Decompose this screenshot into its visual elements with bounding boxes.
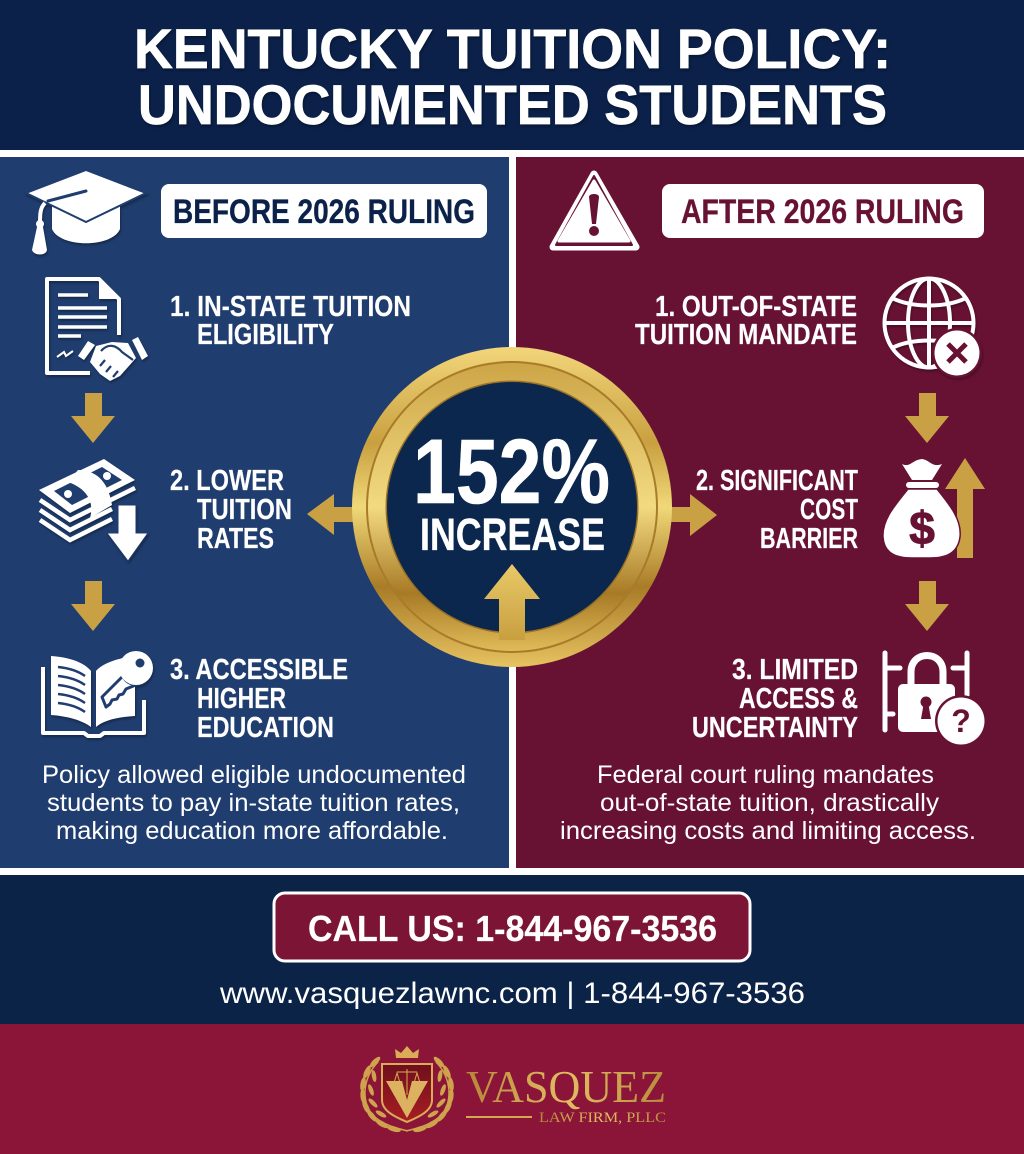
step 3 label [692, 654, 858, 744]
stat label: increase: INCREASE [420, 509, 605, 560]
arrow: medallion to left panel [307, 494, 354, 535]
description: after [560, 761, 976, 845]
step 2 label [170, 465, 292, 555]
icon: padlock with question mark [885, 653, 987, 747]
call-us button: CALL US: 1-844-967-3536 [308, 908, 717, 949]
icon: padlock with question mark: ? [951, 703, 971, 739]
step 2 label: COST [800, 494, 858, 526]
call-us button [274, 893, 750, 961]
step 3 label: UNCERTAINTY [692, 712, 858, 744]
arrow: step 2 to 3 [71, 581, 115, 631]
title banner [0, 0, 1024, 150]
step 3 label: ACCESS & [739, 683, 858, 715]
icon: document and handshake [47, 279, 148, 381]
icon: graduation cap [26, 170, 146, 254]
stat: 152%: 152% [413, 421, 610, 523]
heading pill: after 2026 ruling: AFTER 2026 RULING [681, 193, 964, 231]
step 3 label: HIGHER [197, 683, 286, 715]
panel: before 2026 ruling [0, 157, 509, 868]
step 2 label: RATES [197, 523, 274, 555]
wreath right [406, 1055, 455, 1133]
footer: logo band [0, 1024, 1024, 1154]
description: before: Policy allowed eligible undocumented [42, 761, 466, 789]
description: before [42, 761, 466, 845]
heading pill: before 2026 ruling [161, 184, 487, 238]
scales [394, 1069, 420, 1095]
step 3 label: EDUCATION [197, 712, 334, 744]
icon: warning triangle [553, 174, 636, 247]
arrow: step 1 to 2 [905, 393, 949, 443]
step 1 label: 1. OUT-OF-STATE [655, 291, 857, 323]
description: after: Federal court ruling mandates [597, 761, 934, 789]
icon: money bag with up arrow: $ [909, 502, 935, 554]
arrow: step 1 to 2 [71, 393, 115, 443]
icon: money stack with down arrow [39, 459, 148, 561]
icon: globe with x [884, 278, 982, 378]
description: before: students to pay in-state tuition rates, [47, 789, 460, 817]
step 2 label: 2. SIGNIFICANT [696, 465, 858, 497]
step 1 label: TUITION MANDATE [635, 319, 857, 351]
icon: money bag with up arrow [883, 458, 985, 558]
medallion: 152% increase [352, 347, 672, 667]
logo: crest [359, 1046, 455, 1133]
arrow: step 2 to 3 [905, 581, 949, 631]
wreath left [359, 1055, 408, 1133]
arrow: medallion to right panel [670, 494, 717, 536]
step 2 label [696, 465, 858, 555]
heading pill: after 2026 ruling [662, 184, 984, 238]
logo: wordmark: VASQUEZ [466, 1062, 666, 1112]
step 2 label: TUITION [197, 494, 292, 526]
description: after: increasing costs and limiting access. [560, 817, 976, 845]
step 3 label: 3. ACCESSIBLE [170, 654, 348, 686]
panel: after 2026 ruling [516, 157, 1024, 868]
monogram V [386, 1081, 428, 1118]
footer: contact band [0, 875, 1024, 1024]
icon: book and key [43, 651, 153, 736]
description: after: out-of-state tuition, drastically [600, 789, 940, 817]
medallion arrow [484, 564, 540, 640]
title text: KENTUCKY TUITION POLICY: [134, 17, 891, 80]
step 1 label [635, 291, 857, 351]
crown [395, 1046, 419, 1058]
website and phone: www.vasquezlawnc.com | 1-844-967-3536 [219, 977, 805, 1010]
step 1 label: 1. IN-STATE TUITION [170, 291, 411, 323]
step 2 label: BARRIER [760, 523, 858, 555]
step 3 label: 3. LIMITED [732, 654, 858, 686]
shield [382, 1064, 432, 1122]
heading pill: before 2026 ruling: BEFORE 2026 RULING [173, 193, 475, 231]
step 1 label: ELIGIBILITY [197, 319, 334, 351]
step 2 label: 2. LOWER [170, 465, 284, 497]
step 3 label [170, 654, 348, 744]
description: before: making education more affordable. [56, 817, 448, 845]
title text: UNDOCUMENTED STUDENTS [138, 73, 887, 136]
title text [134, 17, 891, 136]
step 1 label [170, 291, 411, 351]
logo: wordmark: LAW FIRM, PLLC [539, 1110, 666, 1126]
